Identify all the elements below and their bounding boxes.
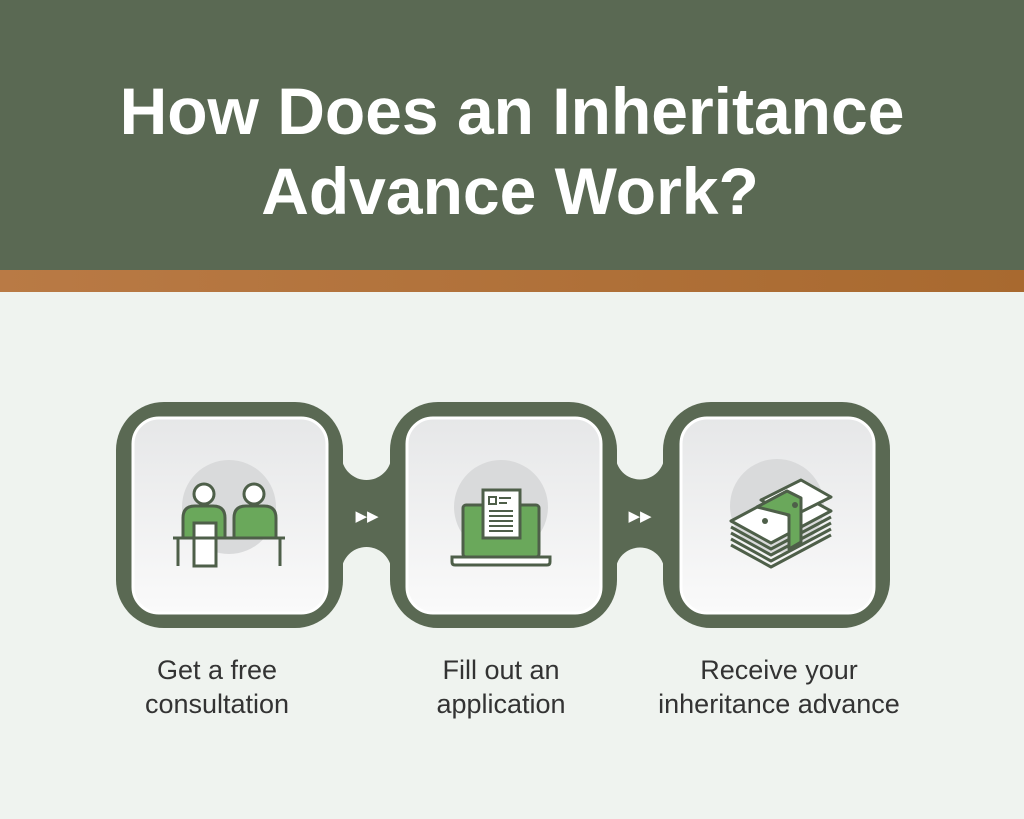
process chain: [116, 402, 890, 628]
title: Advance Work?: [261, 154, 759, 228]
label step 2: Fill out an: [442, 655, 560, 685]
icon: stack of money: [730, 459, 831, 567]
arrow 1: ▶▶: [355, 508, 379, 525]
label step 2: application: [436, 689, 566, 719]
label step 1: [145, 655, 289, 719]
labels: [145, 655, 900, 719]
icon: laptop with application: [452, 460, 550, 565]
header band: [0, 0, 1024, 270]
label step 1: Get a free: [157, 655, 277, 685]
icon: two people at desk: [173, 460, 285, 566]
label step 3: [658, 655, 900, 719]
step 2 box: [390, 402, 617, 628]
arrow 2: ▶▶: [628, 508, 652, 525]
label step 3: Receive your: [700, 655, 858, 685]
step 1 box: [116, 402, 343, 628]
step 3 box: [663, 402, 890, 628]
title: [120, 74, 904, 228]
label step 2: [436, 655, 566, 719]
copper stripe: [0, 270, 1024, 292]
label step 1: consultation: [145, 689, 289, 719]
title: How Does an Inheritance: [120, 74, 904, 148]
label step 3: inheritance advance: [658, 689, 900, 719]
